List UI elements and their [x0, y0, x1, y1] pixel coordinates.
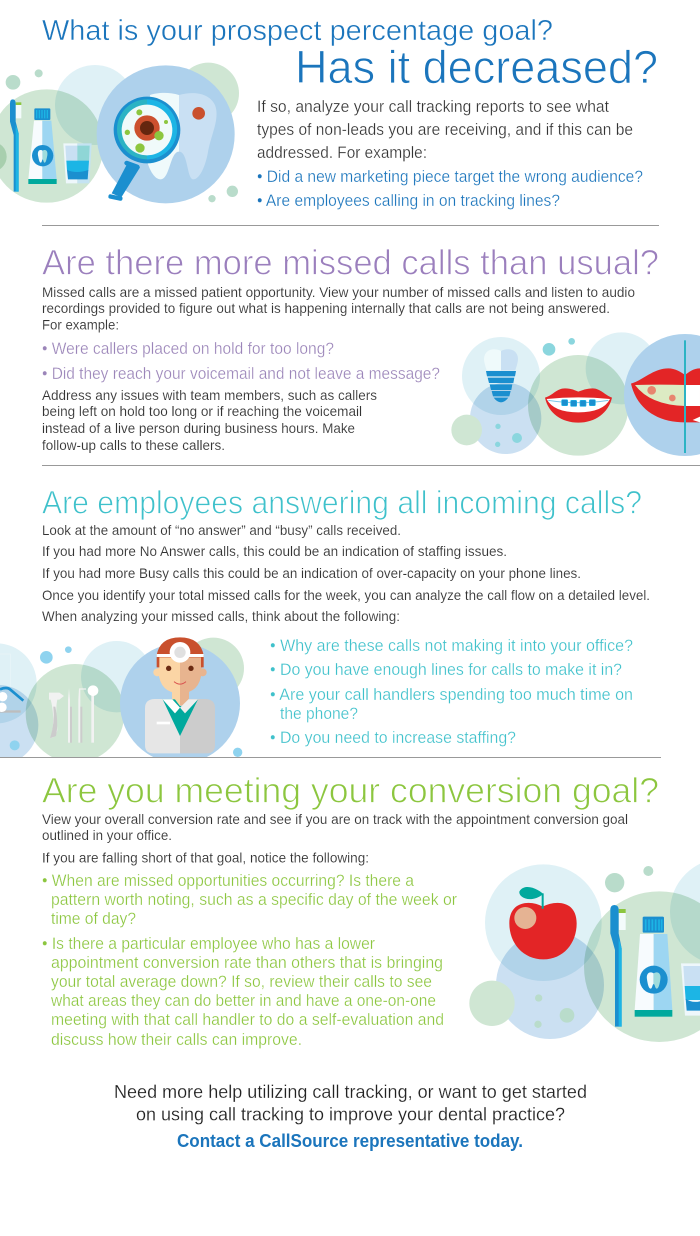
list: green questions: discuss how their calls can improve. [51, 1031, 302, 1049]
text block: missed calls intro [42, 284, 635, 332]
title: conversion goal: Are you meeting your conversion goal? [42, 770, 659, 810]
text block: intro paragraph [257, 98, 633, 162]
text block: intro paragraph: types of non-leads you are receiving, and if this can be [257, 121, 633, 139]
icon: dental implant [484, 349, 518, 402]
text block: missed calls intro: Missed calls are a missed patient opportunity. View your number of missed calls and listen to audio [42, 284, 635, 300]
illustration: toothbrush, toothpaste and magnified tooth [0, 63, 239, 203]
text block: no answer and busy [42, 522, 650, 624]
text block: no answer and busy: If you had more Busy calls this could be an indication of over-capacity on your phone lines. [42, 565, 581, 581]
list: purple questions: • Were callers placed on hold for too long? [42, 340, 334, 358]
link: contact CallSource: Contact a CallSource representative today. [177, 1131, 523, 1151]
list: blue questions: • Did a new marketing piece target the wrong audience? [257, 168, 643, 186]
icon: tooth [147, 93, 217, 179]
icon: toothbrush [610, 905, 626, 1027]
illustration: apple and toothcare [469, 858, 700, 1042]
text block: conversion intro: outlined in your office. [42, 827, 172, 843]
icon: toothbrush [10, 99, 21, 192]
icon: dental instruments [49, 685, 98, 743]
list: green questions: pattern worth noting, such as a specific day of the week or [51, 891, 457, 909]
heading: has it decreased: Has it decreased? [295, 41, 658, 93]
icon: magnifying glass [108, 97, 180, 201]
text block: address issues: Address any issues with team members, such as callers [42, 387, 377, 403]
text block: intro paragraph: addressed. For example: [257, 144, 427, 162]
list: teal questions [270, 637, 633, 747]
text block: no answer and busy: If you had more No Answer calls, this could be an indication of staffing issues. [42, 543, 507, 559]
text block: intro paragraph: If so, analyze your call tracking reports to see what [257, 98, 609, 116]
list: green questions: what areas they can do better in and have a one-on-one [50, 992, 436, 1010]
text block: conversion intro [42, 811, 628, 866]
text block: missed calls intro: For example: [42, 316, 119, 332]
icon: dental chair fragment [0, 654, 23, 713]
icon: dentist [145, 637, 215, 753]
list: green questions: • When are missed opportunities occurring? Is there a [42, 872, 415, 890]
text block: call to action: Need more help utilizing call tracking, or want to get started [114, 1082, 587, 1102]
title: answering calls: Are employees answering all incoming calls? [42, 484, 642, 520]
title: prospect percentage goal: What is your prospect percentage goal? [42, 15, 553, 47]
icon: large smile split view [631, 340, 700, 453]
text block: address issues [42, 387, 377, 453]
icon: smile with braces [545, 388, 612, 423]
icon: glass of water [63, 143, 92, 183]
text block: address issues: instead of a live person during business hours. Make [42, 420, 355, 436]
text block: no answer and busy: Look at the amount of “no answer” and “busy” calls received. [42, 522, 401, 538]
text block: address issues: follow-up calls to these callers. [42, 437, 225, 453]
list: blue questions: • Are employees calling in on tracking lines? [257, 192, 560, 210]
text block: call to action: on using call tracking to improve your dental practice? [136, 1104, 565, 1124]
list: purple questions: • Did they reach your voicemail and not leave a message? [42, 365, 440, 383]
icon: glass of water [681, 963, 700, 1016]
list: green questions: your total average down? If so, review their calls to see [51, 973, 432, 991]
text block: no answer and busy: Once you identify your total missed calls for the week, you can analyze the call flow on a detailed level. [42, 587, 650, 603]
title: missed calls: Are there more missed calls than usual? [42, 242, 659, 282]
icon: apple [509, 887, 577, 959]
list: teal questions: • Why are these calls not making it into your office? [270, 637, 633, 655]
list: teal questions: • Do you need to increase staffing? [270, 729, 516, 747]
list: green questions: appointment conversion rate than others that is bringing [51, 954, 443, 972]
text block: no answer and busy: When analyzing your missed calls, think about the following: [42, 608, 400, 624]
icon: toothpaste [28, 108, 57, 184]
text block: conversion intro: View your overall conversion rate and see if you are on track with the appointment conversion goal [42, 811, 628, 827]
text block: call to action [114, 1082, 587, 1124]
list: green questions: time of day? [51, 910, 136, 928]
list: teal questions: • Are your call handlers spending too much time on [270, 686, 633, 704]
list: green questions [42, 872, 457, 1049]
list: green questions: • Is there a particular employee who has a lower [42, 935, 375, 953]
list: green questions: meeting with that call handler to do a self-evaluation and [51, 1011, 444, 1029]
illustration: dental implant and smiles [451, 332, 700, 456]
list: purple questions [42, 340, 440, 383]
illustration: dentist and instruments [0, 637, 244, 765]
text block: conversion intro: If you are falling short of that goal, notice the following: [42, 850, 369, 866]
list: teal questions: the phone? [280, 705, 358, 723]
icon: toothpaste [635, 917, 672, 1017]
list: blue questions [257, 168, 643, 210]
text block: missed calls intro: recordings provided to figure out what is happening internally that calls are not being answered. [42, 300, 610, 316]
text block: address issues: being left on hold too long or if reaching the voicemail [42, 403, 362, 419]
list: teal questions: • Do you have enough lines for calls to make it in? [270, 661, 622, 679]
